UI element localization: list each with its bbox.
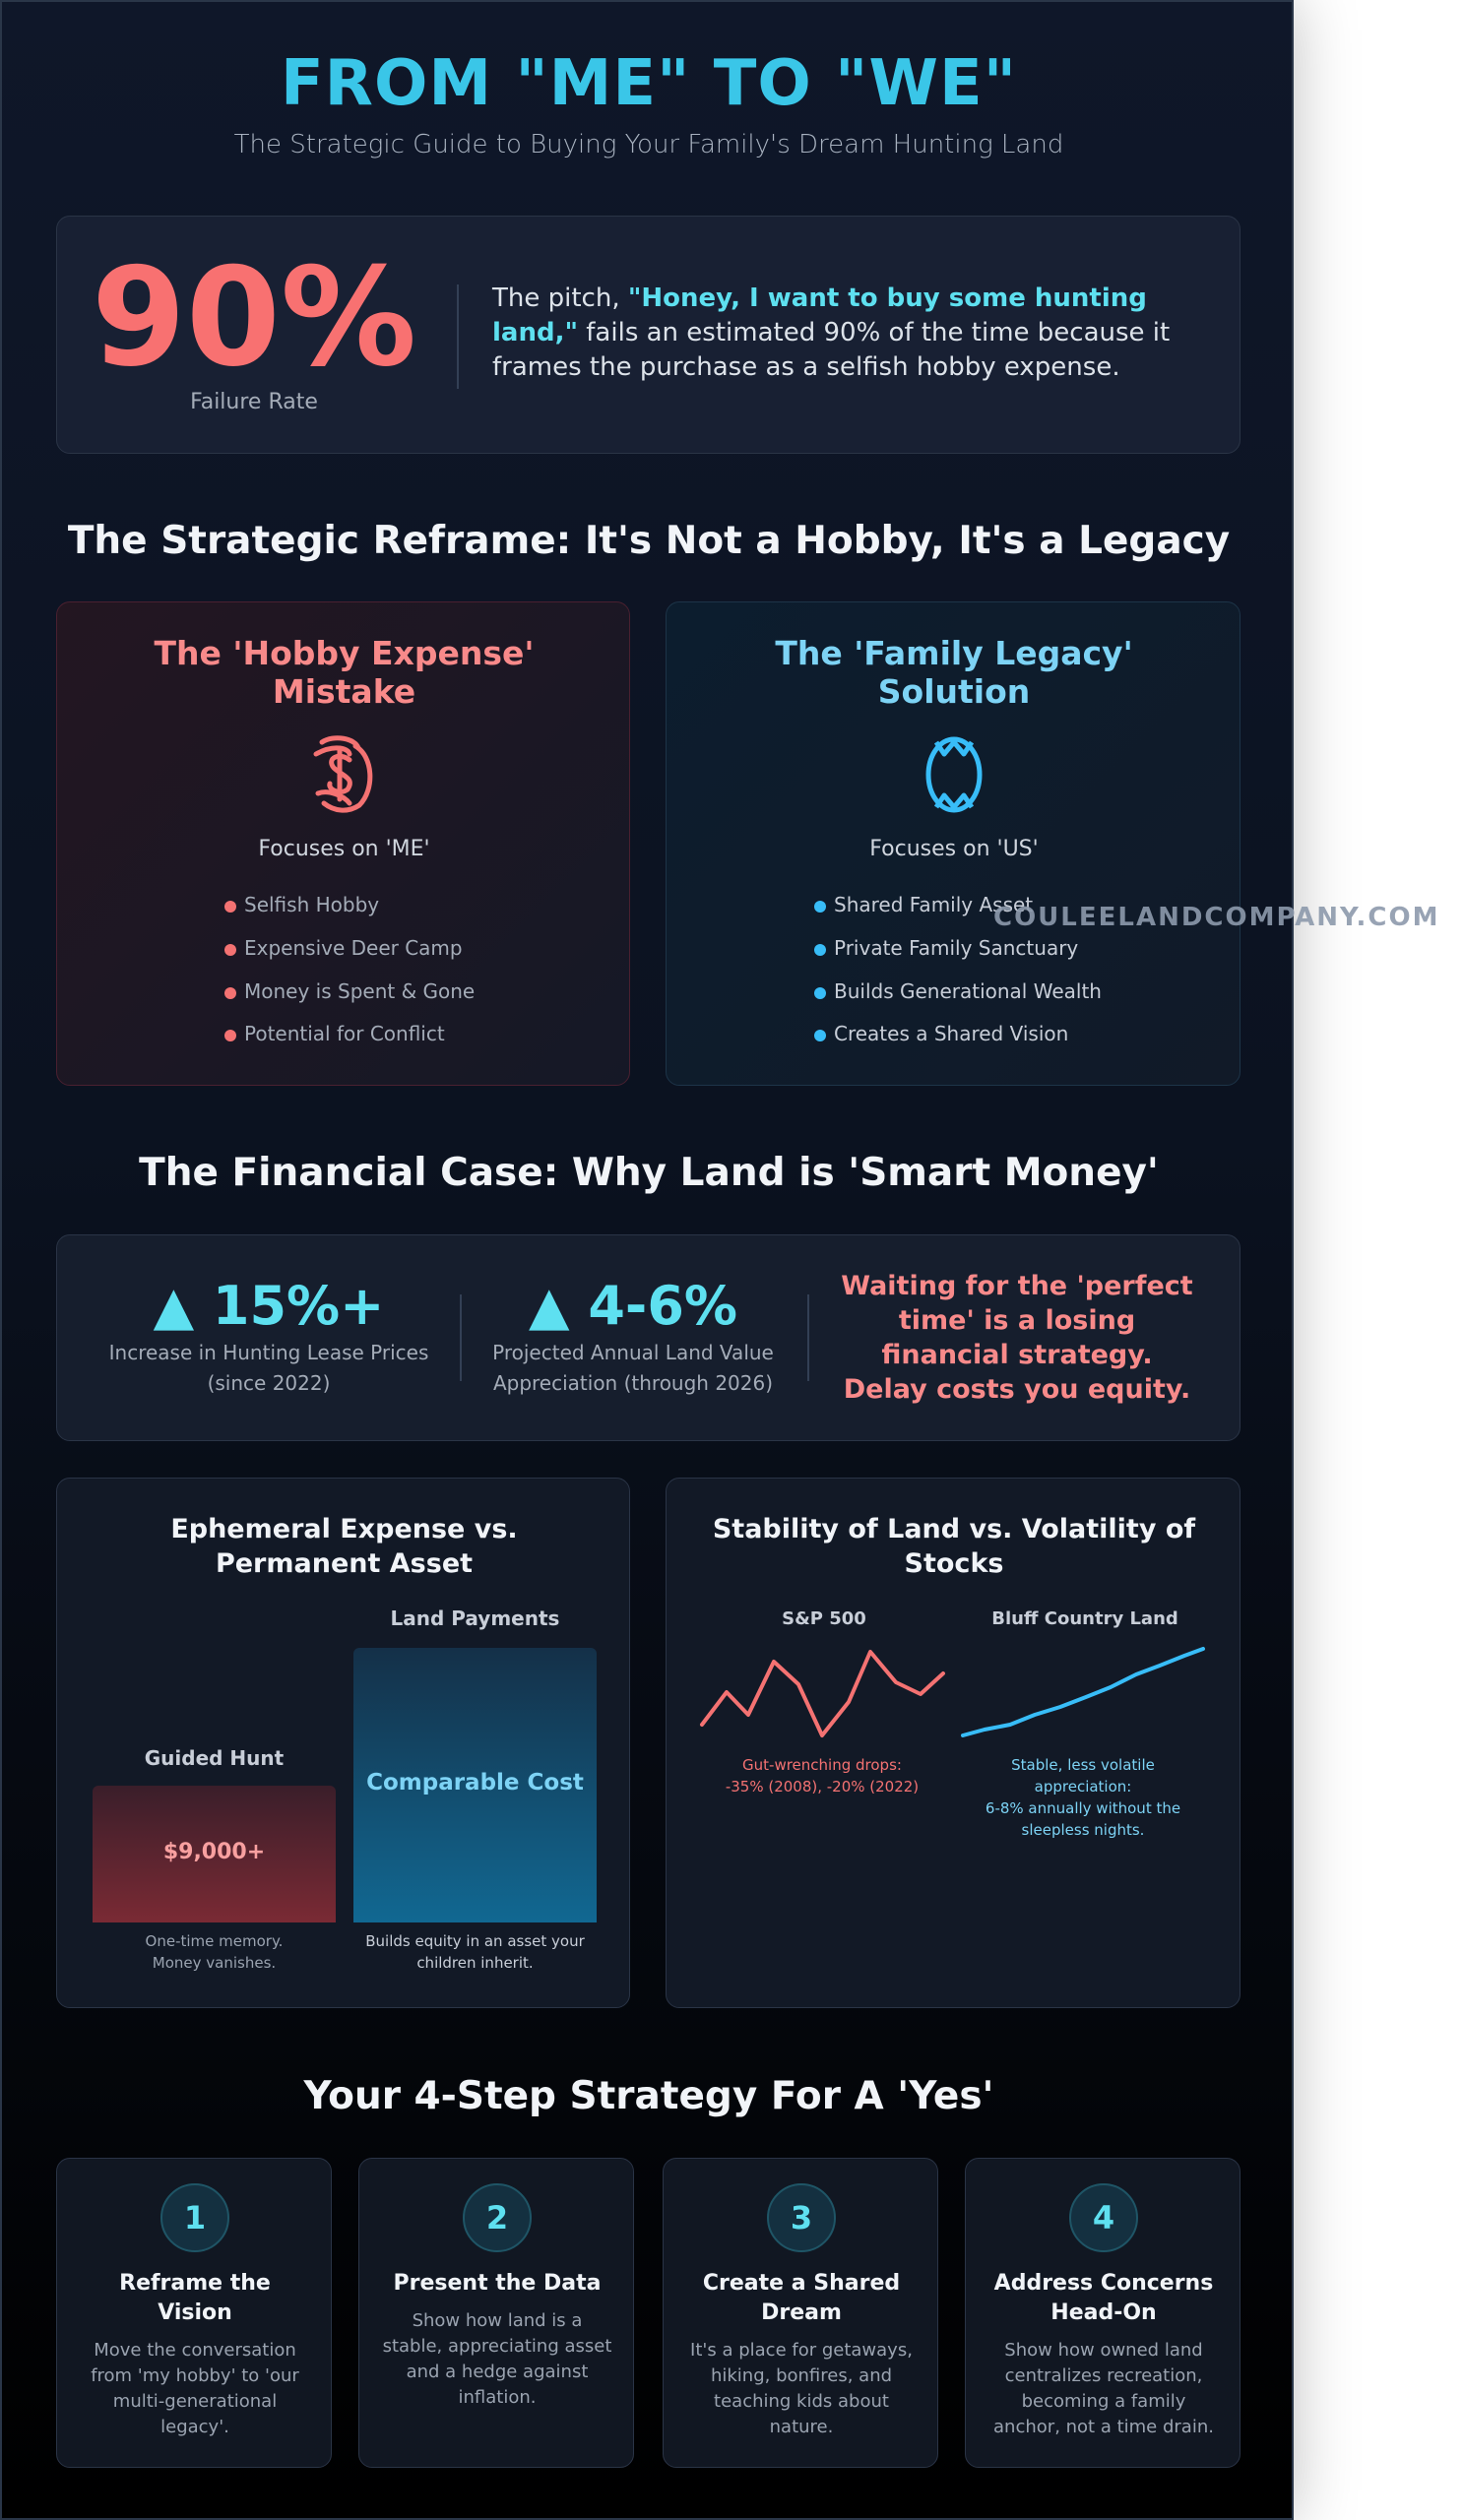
panel: family legacy bbox=[666, 601, 1240, 1086]
chart title: Permanent Asset bbox=[216, 1548, 473, 1579]
panel: bar chart: Builds equity in an asset your children inherit. bbox=[365, 1932, 585, 1972]
chart title bbox=[170, 1514, 518, 1579]
list: Selfish Hobby bbox=[244, 893, 379, 916]
heading: financial case: The Financial Case: Why Land is 'Smart Money' bbox=[139, 1151, 1159, 1195]
caption red: -35% (2008), -20% (2022) bbox=[726, 1778, 919, 1796]
heading: strategic reframe: The Strategic Reframe: It's Not a Hobby, It's a Legacy bbox=[68, 519, 1230, 563]
stat 4-6%: ▲ 4-6% bbox=[529, 1275, 737, 1337]
callout: waiting: Delay costs you equity. bbox=[844, 1374, 1190, 1405]
step 4 bbox=[965, 2158, 1240, 2468]
step 1: Move the conversation from 'my hobby' to 'our multi-generational legacy'. bbox=[91, 2340, 299, 2437]
caption blue: Stable, less volatile appreciation: bbox=[1011, 1756, 1155, 1796]
captions bbox=[146, 1932, 283, 1972]
bar: land payments: Land Payments bbox=[391, 1606, 559, 1630]
chart title: Stability of Land vs. Volatility of bbox=[713, 1514, 1195, 1544]
panel: stats: Projected Annual Land Value bbox=[492, 1341, 774, 1364]
label land: Bluff Country Land bbox=[991, 1608, 1178, 1629]
card title bbox=[775, 634, 1133, 711]
panel: family legacy: Builds Generational Wealth bbox=[834, 979, 1102, 1003]
panel: family legacy: Creates a Shared Vision bbox=[834, 1022, 1068, 1045]
card title: Mistake bbox=[273, 672, 415, 711]
step 1: Reframe the bbox=[119, 2271, 271, 2296]
panel: line chart bbox=[666, 1478, 1240, 2008]
list: Shared Family Asset bbox=[834, 893, 1033, 916]
icon: money hand bbox=[313, 735, 372, 813]
caption blue: 6-8% annually without the sleepless nights. bbox=[986, 1799, 1180, 1839]
panel: stats: (since 2022) bbox=[208, 1371, 330, 1395]
chart title: Stocks bbox=[905, 1548, 1003, 1579]
title: FROM "ME" TO "WE" bbox=[281, 47, 1017, 120]
callout: waiting: Waiting for the 'perfect time' is a losing financial strategy. bbox=[841, 1271, 1193, 1370]
hero stat panel bbox=[56, 216, 1240, 454]
caption red bbox=[726, 1756, 919, 1796]
subtitle: The Strategic Guide to Buying Your Family's Dream Hunting Land bbox=[234, 130, 1063, 159]
line chart bbox=[699, 1646, 1205, 1738]
card title: Solution bbox=[878, 672, 1030, 711]
panel: bar chart: $9,000+ bbox=[163, 1840, 265, 1864]
bar: guided hunt: Guided Hunt bbox=[145, 1746, 284, 1770]
panel: stats: Increase in Hunting Lease Prices bbox=[109, 1341, 428, 1364]
card title bbox=[154, 634, 534, 711]
pitch text: The pitch, "Honey, I want to buy some hunting land," fails an estimated 90% of the time because it frames the purchase as a selfish hobby expense. bbox=[492, 284, 1170, 382]
step 4: Show how owned land centralizes recreation, becoming a family anchor, not a time drain. bbox=[993, 2340, 1214, 2437]
step 3: 3 bbox=[791, 2199, 812, 2236]
panel: hobby expense: Expensive Deer Camp bbox=[244, 936, 463, 960]
caption red: Gut-wrenching drops: bbox=[742, 1756, 902, 1774]
step 2: Show how land is a bbox=[413, 2310, 582, 2331]
panel: hobby expense bbox=[56, 601, 630, 1086]
label S&P: S&P 500 bbox=[782, 1608, 866, 1629]
step 3: Dream bbox=[761, 2300, 842, 2325]
step 2: stable, appreciating asset and a hedge against inflation. bbox=[383, 2336, 611, 2408]
step 2: 2 bbox=[486, 2199, 508, 2236]
panel: bar chart bbox=[56, 1478, 630, 2008]
watermark: COULEELANDCOMPANY.COM bbox=[993, 903, 1439, 932]
step 1: 1 bbox=[184, 2199, 206, 2236]
card title: The 'Hobby Expense' bbox=[155, 634, 534, 672]
step 1: Vision bbox=[158, 2300, 232, 2325]
captions: One-time memory. bbox=[146, 1932, 283, 1950]
step 4: 4 bbox=[1093, 2199, 1114, 2236]
stat 15%: ▲ 15%+ bbox=[154, 1275, 384, 1337]
captions: Money vanishes. bbox=[153, 1954, 276, 1972]
icon: hourglass bbox=[925, 736, 983, 813]
panel: stats: Appreciation (through 2026) bbox=[493, 1371, 773, 1395]
caption blue bbox=[986, 1756, 1180, 1839]
step 2 bbox=[358, 2158, 634, 2468]
step 3 bbox=[663, 2158, 938, 2468]
step 4: Address Concerns bbox=[994, 2271, 1213, 2296]
card title: The 'Family Legacy' bbox=[775, 634, 1133, 672]
step 3: It's a place for getaways, hiking, bonfires, and teaching kids about nature. bbox=[690, 2340, 913, 2437]
panel: hobby expense: Potential for Conflict bbox=[244, 1022, 445, 1045]
focus label: Focuses on 'ME' bbox=[258, 837, 430, 861]
big stat 90%: 90% bbox=[92, 238, 416, 397]
step 2: Present the Data bbox=[394, 2271, 601, 2296]
heading: 4 steps: Your 4-Step Strategy For A 'Yes' bbox=[304, 2074, 993, 2118]
chart title bbox=[713, 1514, 1195, 1579]
step 3: Create a Shared bbox=[703, 2271, 900, 2296]
step 1 bbox=[56, 2158, 332, 2468]
panel: family legacy: Private Family Sanctuary bbox=[834, 936, 1078, 960]
step 4: Head-On bbox=[1050, 2300, 1157, 2325]
panel: bar chart: Comparable Cost bbox=[366, 1770, 584, 1796]
failure rate label: Failure Rate bbox=[190, 390, 318, 414]
focus label: Focuses on 'US' bbox=[869, 837, 1039, 861]
panel: stats bbox=[56, 1234, 1240, 1441]
chart title: Ephemeral Expense vs. bbox=[170, 1514, 518, 1544]
panel: hobby expense: Money is Spent & Gone bbox=[244, 979, 475, 1003]
